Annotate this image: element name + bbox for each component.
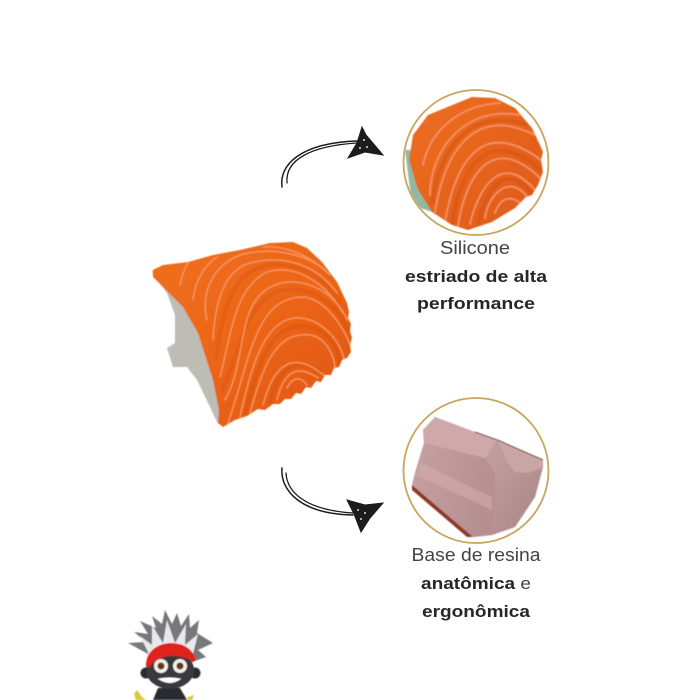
- teal resin edge: [405, 150, 432, 212]
- resin base, grey underside: [153, 275, 228, 424]
- orange ridged surface: [153, 242, 352, 427]
- orange close-up: [409, 97, 543, 230]
- caption: resin base: ergonômica: [422, 602, 531, 621]
- caption: silicone: [405, 238, 548, 313]
- body: [153, 688, 187, 700]
- detail circle: resin base: [404, 398, 548, 543]
- red lower edge: [412, 485, 473, 537]
- caption: resin base: [412, 545, 542, 621]
- mascot: [128, 610, 213, 700]
- underlying resin silhouette: [423, 432, 544, 536]
- smile: [159, 678, 180, 682]
- caption: silicone: estriado de alta: [405, 267, 548, 286]
- detail circle: silicone: [404, 90, 548, 235]
- head: [146, 651, 194, 689]
- caption: silicone: Silicone: [440, 238, 510, 258]
- gold ring: [404, 90, 548, 235]
- arrow to silicone detail: [282, 127, 383, 187]
- arrow to resin detail: [282, 468, 383, 532]
- scoop: [497, 440, 543, 473]
- ears: [140, 668, 152, 678]
- ridges on the silicone: [180, 247, 350, 423]
- caption: resin base: Base de resina: [412, 545, 542, 565]
- main product: salmon silicone piece: [153, 242, 352, 427]
- spiky hair: [128, 610, 213, 665]
- yellow tool: [134, 690, 146, 700]
- dark top edge: [475, 432, 543, 460]
- gold ring: [404, 398, 548, 543]
- red headband: [146, 643, 196, 668]
- light band on concave side: [416, 463, 492, 510]
- concave side: [412, 443, 495, 537]
- darker bands between ridges: [216, 265, 349, 415]
- eyes: [154, 659, 168, 673]
- caption: resin base: anatômica e: [421, 574, 531, 593]
- caption: silicone: performance: [417, 294, 535, 313]
- end face: [485, 442, 543, 535]
- top band: [423, 417, 498, 458]
